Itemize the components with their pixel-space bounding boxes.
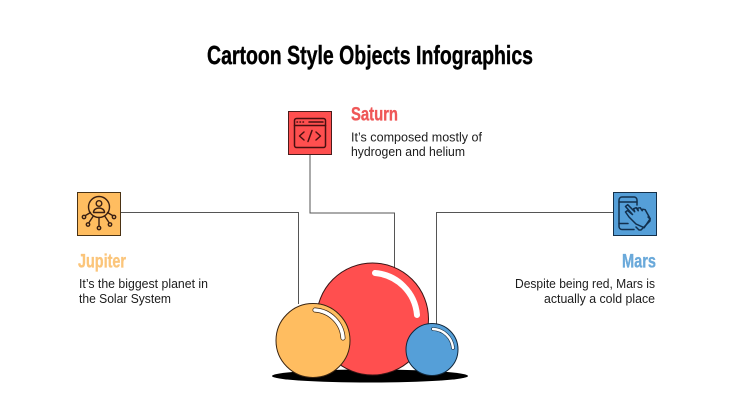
heading: Jupiter: Jupiter xyxy=(78,252,126,272)
red sphere xyxy=(316,263,428,375)
connector: Mars xyxy=(436,212,613,326)
text: Jupiter description: It’s the biggest planet in xyxy=(79,277,208,291)
blue sphere xyxy=(406,324,458,376)
illustration: spheres xyxy=(272,263,468,382)
text: Saturn description: hydrogen and helium xyxy=(351,145,465,159)
icon: user network (Jupiter) xyxy=(78,192,120,236)
panel: Jupiter text xyxy=(78,252,208,306)
text: Saturn description: It’s composed mostly of xyxy=(351,130,483,144)
icon: code window (Saturn) xyxy=(288,112,332,154)
icon: touch phone (Mars) xyxy=(614,192,656,236)
title: Cartoon Style Objects Infographics xyxy=(207,40,533,70)
connector: Saturn xyxy=(310,154,394,268)
text: Mars description: actually a cold place xyxy=(544,292,655,306)
connector: Jupiter xyxy=(121,212,298,304)
yellow sphere xyxy=(276,304,350,378)
heading: Saturn: Saturn xyxy=(351,104,398,126)
heading: Mars: Mars xyxy=(622,252,656,272)
text: Mars description: Despite being red, Mars is xyxy=(515,277,655,291)
panel: Mars text xyxy=(515,252,656,306)
text: Jupiter description: the Solar System xyxy=(79,292,171,306)
ground shadow xyxy=(272,370,468,382)
panel: Saturn text xyxy=(351,104,483,159)
